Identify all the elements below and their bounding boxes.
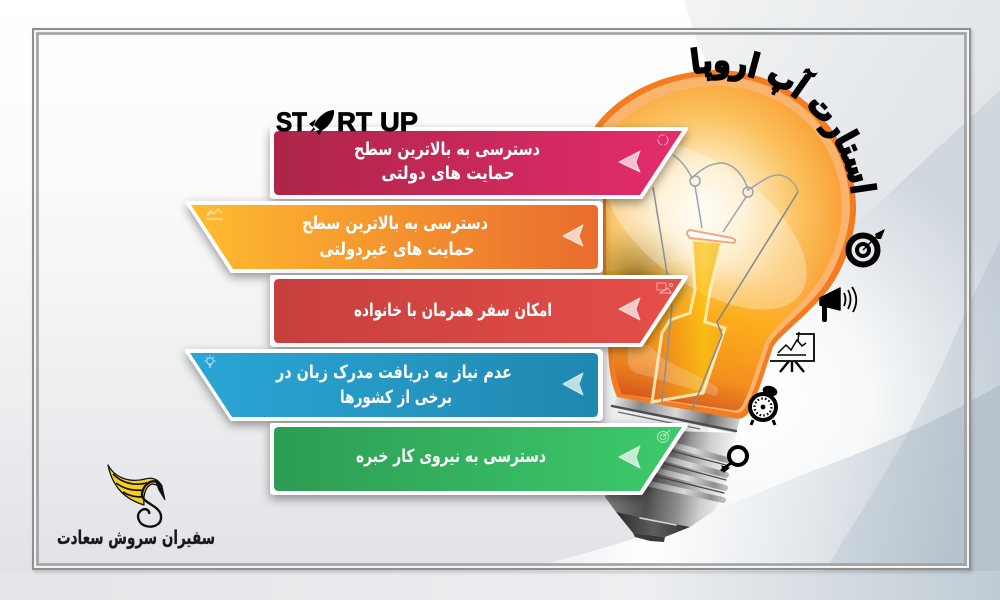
- arrow: [619, 446, 640, 468]
- text: دسترسی به نیروی کار خبره: [356, 446, 546, 467]
- icon: line chart: [206, 209, 223, 219]
- text: امکان سفر همزمان با خانواده: [354, 300, 552, 321]
- text: حمایت های غیردولتی: [320, 239, 474, 260]
- heading: start up: UP: [380, 107, 418, 137]
- logo swan: [138, 480, 165, 527]
- text: دسترسی به بالاترین سطح: [354, 139, 540, 160]
- logo: [57, 465, 215, 549]
- text: عدم نیاز به دریافت مدرک زبان در: [275, 362, 512, 383]
- panel: language certificate: [187, 351, 601, 419]
- arrow: [563, 373, 583, 395]
- filament wires: [653, 155, 798, 410]
- light bulb: [574, 70, 856, 542]
- icon: ring: [658, 135, 668, 145]
- heading: start up: ST: [276, 107, 307, 137]
- text: حمایت های دولتی: [382, 163, 514, 184]
- text: [302, 213, 488, 260]
- glass globe: [579, 70, 856, 419]
- text: [275, 362, 512, 408]
- panel: family travel: [272, 277, 686, 345]
- icon: alarm clock: [750, 384, 779, 425]
- title: استارت آپ اروپا: [690, 46, 878, 194]
- icon: megaphone: [820, 287, 856, 322]
- panel: non-government support: [188, 203, 601, 271]
- icon: monitor: [657, 283, 672, 293]
- glass stem: [652, 230, 735, 402]
- icon: light bulb: [204, 355, 216, 367]
- icon: magnifier: [722, 447, 747, 472]
- logo name: سفیران سروش سعادت: [57, 527, 215, 549]
- icon: presentation board: [770, 332, 814, 372]
- icon: small target: [658, 430, 670, 442]
- icon: target: [848, 229, 885, 264]
- heading: start up: [276, 107, 418, 137]
- text: دسترسی به بالاترین سطح: [302, 213, 488, 234]
- arrow: [563, 225, 583, 246]
- panel: government support: [272, 129, 686, 197]
- metal screw base: [605, 397, 740, 542]
- logo wing: [108, 465, 162, 505]
- arrow: [619, 298, 640, 320]
- icon: rocket: [309, 110, 334, 135]
- text: [354, 139, 540, 184]
- panel: skilled workforce: [272, 425, 686, 493]
- arrow: [619, 151, 640, 172]
- heading: start up: RT: [337, 107, 372, 137]
- text: برخی از کشورها: [340, 387, 452, 408]
